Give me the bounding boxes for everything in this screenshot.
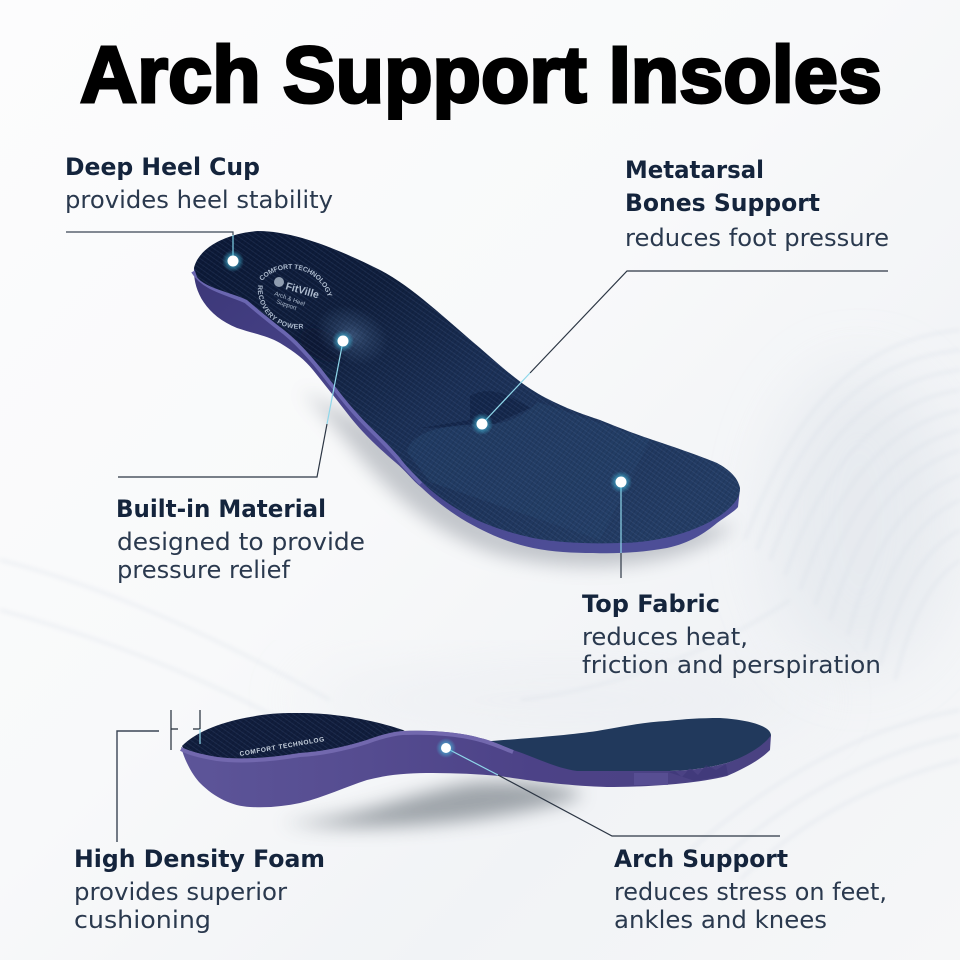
bottom insole <box>181 713 771 827</box>
dot: deep heel cup <box>222 250 244 272</box>
bottom insole navy forefoot <box>480 718 771 775</box>
label: top fabric <box>582 590 881 679</box>
insole rim <box>193 272 421 484</box>
leader: deep heel cup <box>66 232 233 261</box>
label: top fabric: friction and perspiration <box>582 651 881 679</box>
bottom insole foam body <box>181 731 771 807</box>
label: built-in material <box>116 495 365 584</box>
metatarsal pad <box>420 391 530 428</box>
insole logo: COMFORT TECHNOLOGY <box>260 264 332 296</box>
label: high density foam <box>74 845 325 934</box>
label: arch support: Arch Support <box>614 845 788 873</box>
label: metatarsal bones support: reduces foot pressure <box>625 224 889 252</box>
leader: built-in material <box>118 341 343 477</box>
arch pad <box>310 348 339 360</box>
insole logo: FitVille <box>284 280 321 301</box>
label: deep heel cup: provides heel stability <box>65 186 333 214</box>
logo fragment: COMFORT TECHNOLOG <box>239 736 325 758</box>
label: high density foam: cushioning <box>74 906 211 934</box>
insole logo <box>258 264 332 329</box>
dot: arch support <box>436 738 456 758</box>
title: Arch Support Insoles <box>80 30 882 119</box>
dot: metatarsal <box>471 413 493 435</box>
label: built-in material: Built-in Material <box>116 495 326 523</box>
leader: top fabric <box>620 482 622 578</box>
label: arch support: ankles and knees <box>614 906 827 934</box>
label: top fabric: reduces heat, <box>582 623 748 651</box>
label: metatarsal bones support: Bones Support <box>625 189 820 217</box>
leader: high density foam <box>117 710 200 842</box>
label: metatarsal bones support: Metatarsal <box>625 156 764 184</box>
label: arch support <box>614 845 887 934</box>
dot: top fabric <box>610 471 632 493</box>
leader: arch support <box>446 748 780 836</box>
top insole <box>191 231 740 575</box>
label: high density foam: High Density Foam <box>74 845 325 873</box>
label: metatarsal bones support <box>625 156 889 252</box>
label: built-in material: designed to provide <box>117 528 365 556</box>
insole foam side <box>194 268 740 553</box>
arch ridges <box>668 764 728 781</box>
bottom insole rim <box>181 733 513 760</box>
label: top fabric: Top Fabric <box>582 590 720 618</box>
label: arch support: reduces stress on feet, <box>614 878 887 906</box>
dot: built-in material <box>332 330 354 352</box>
insole logo: Support <box>275 299 297 312</box>
label: deep heel cup <box>65 153 333 214</box>
leader: metatarsal <box>482 271 888 424</box>
bottom insole navy heel <box>182 713 420 770</box>
insole logo: Arch & Heel <box>273 291 305 308</box>
label: deep heel cup: Deep Heel Cup <box>65 153 260 181</box>
insole shadow <box>300 390 735 566</box>
label: high density foam: provides superior <box>74 878 287 906</box>
insole top surface <box>194 231 740 543</box>
label: built-in material: pressure relief <box>117 556 291 584</box>
bottom insole shadow <box>280 782 581 827</box>
insole logo: RECOVERY POWER <box>258 286 304 329</box>
